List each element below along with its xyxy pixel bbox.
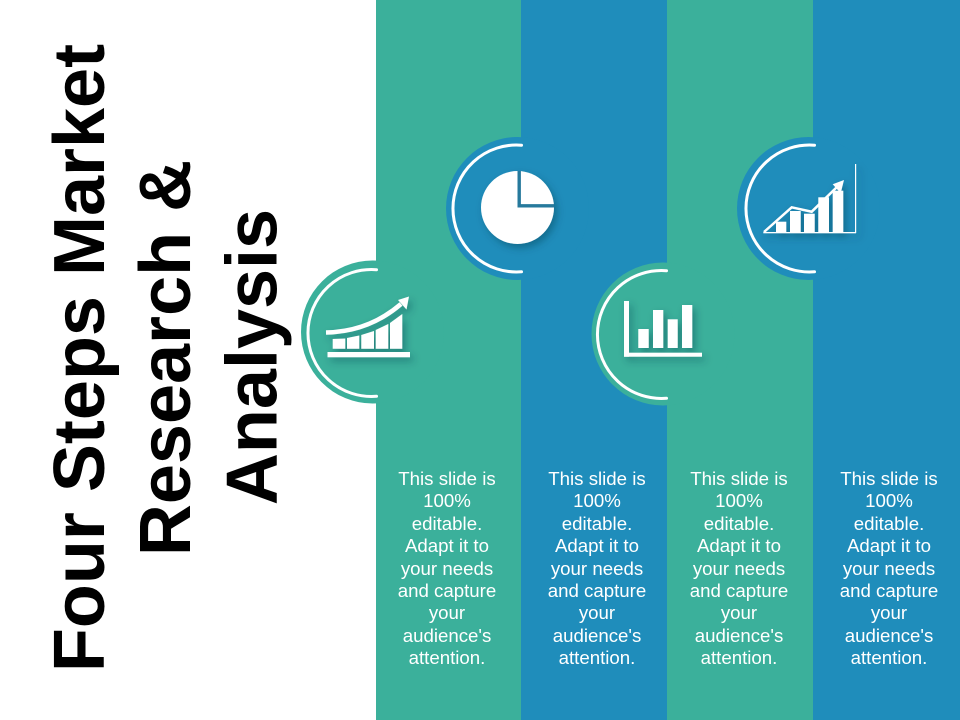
text block: step 1: your xyxy=(429,602,465,623)
text block: step 4: your needs xyxy=(843,558,935,579)
text block: step 2: audience's xyxy=(553,625,641,646)
text block: step 4 xyxy=(840,468,938,668)
panel: step 4 column xyxy=(813,0,960,720)
text block: step 3: editable. xyxy=(704,513,774,534)
title: Analysis xyxy=(212,209,292,505)
text block: step 4: Adapt it to xyxy=(847,535,931,556)
step 1 semicircle badge xyxy=(301,260,444,404)
text block: step 4: 100% xyxy=(865,490,913,511)
text block: step 1: and capture xyxy=(398,580,496,601)
text block: step 3 xyxy=(690,468,788,668)
text block: step 4: This slide is xyxy=(840,468,938,489)
text block: step 1: your needs xyxy=(401,558,493,579)
text block: step 4: editable. xyxy=(854,513,924,534)
text block: step 2: This slide is xyxy=(548,468,646,489)
text block: step 2: Adapt it to xyxy=(555,535,639,556)
text block: step 3: Adapt it to xyxy=(697,535,781,556)
panel: step 2 column xyxy=(521,0,667,720)
panel: step 3 column xyxy=(667,0,813,720)
text block: step 4: attention. xyxy=(851,647,927,668)
step 3 semicircle badge xyxy=(592,262,734,406)
icon: rising curve bar chart xyxy=(326,296,410,357)
text block: step 2: and capture xyxy=(548,580,646,601)
text block: step 1: editable. xyxy=(412,513,482,534)
title: Four Steps Market xyxy=(40,44,120,672)
step 2 semicircle badge xyxy=(446,137,589,280)
title: Research & xyxy=(126,160,206,556)
icon: column chart with axes xyxy=(624,301,702,357)
text block: step 1: attention. xyxy=(409,647,485,668)
text block: step 3: your needs xyxy=(693,558,785,579)
step 4 semicircle badge xyxy=(737,137,880,280)
text block: step 3: attention. xyxy=(701,647,777,668)
text block: step 2: 100% xyxy=(573,490,621,511)
icon: bar chart with trend arrow xyxy=(763,164,856,233)
text block: step 3: This slide is xyxy=(690,468,788,489)
text block: step 1: audience's xyxy=(403,625,491,646)
text block: step 2: your xyxy=(579,602,615,623)
text block: step 1: 100% xyxy=(423,490,471,511)
text block: step 4: and capture xyxy=(840,580,938,601)
text block: step 2: attention. xyxy=(559,647,635,668)
text block: step 2 xyxy=(548,468,646,668)
text block: step 1 xyxy=(398,468,496,668)
text block: step 3: and capture xyxy=(690,580,788,601)
text block: step 2: your needs xyxy=(551,558,643,579)
panel: step 1 column xyxy=(376,0,521,720)
text block: step 1: Adapt it to xyxy=(405,535,489,556)
text block: step 3: 100% xyxy=(715,490,763,511)
text block: step 1: This slide is xyxy=(398,468,496,489)
text block: step 3: your xyxy=(721,602,757,623)
title xyxy=(40,44,292,672)
text block: step 2: editable. xyxy=(562,513,632,534)
text block: step 4: your xyxy=(871,602,907,623)
text block: step 3: audience's xyxy=(695,625,783,646)
text block: step 4: audience's xyxy=(845,625,933,646)
icon: pie chart xyxy=(481,171,554,244)
